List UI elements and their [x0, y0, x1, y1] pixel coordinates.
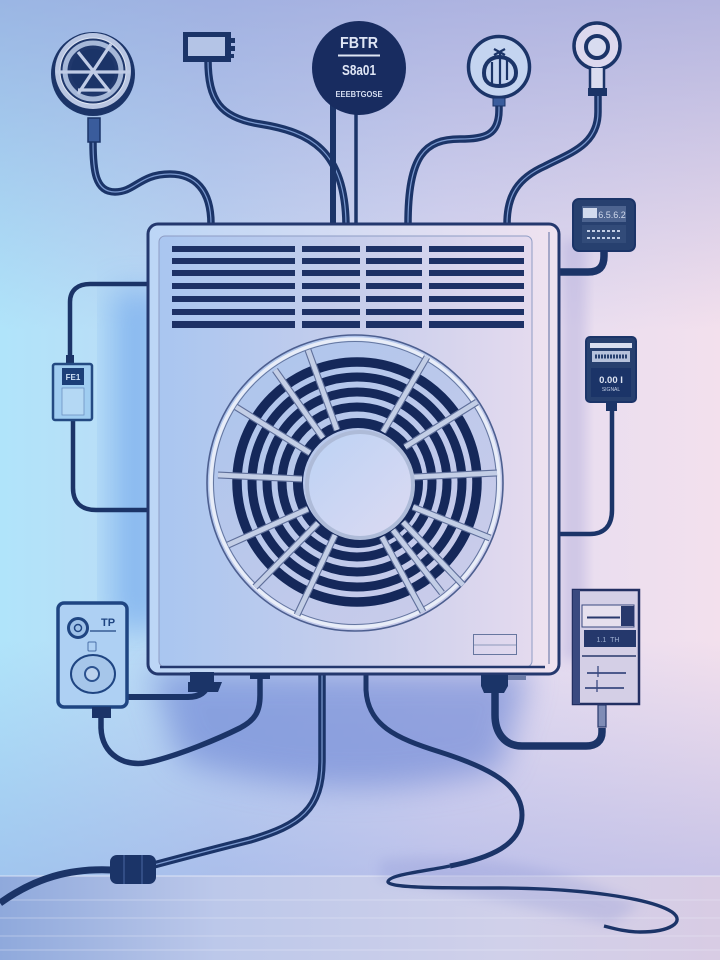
- icon: round dial: [468, 36, 530, 106]
- fan guard: [207, 335, 503, 631]
- cable junction block: [110, 855, 156, 884]
- right bottom connector: [481, 675, 526, 693]
- cables: left switch to unit: [70, 284, 150, 510]
- cable: top rectangle display to unit: [208, 60, 346, 224]
- cables: central badge to unit: [333, 105, 356, 224]
- cable: ring sensor to unit: [507, 96, 598, 224]
- icon: left inline switch: [53, 355, 92, 420]
- icon: lower right electrical box: [573, 590, 639, 727]
- cable: upper right meter to unit: [558, 250, 604, 272]
- meter readout: 6.5.6.2: [598, 210, 626, 220]
- cables: lower left control to unit: [101, 675, 260, 763]
- fan hub: [307, 432, 413, 538]
- box display reading: 1.1 TH: [597, 637, 619, 644]
- cable: lower right box to unit: [495, 692, 602, 746]
- badge small text: EEEBTGOSE: [336, 90, 383, 99]
- icon: top left crossed gauge: [51, 32, 135, 142]
- shadows cast by the unit: [112, 240, 640, 925]
- top vent grille: [172, 246, 524, 328]
- icon: upper right meter: [573, 199, 635, 251]
- switch label: FE1: [66, 373, 81, 382]
- looping cable on floor: [366, 672, 677, 932]
- air conditioner unit: [148, 224, 559, 674]
- meter value: 0.00 I: [599, 375, 623, 386]
- unit housing: [148, 224, 559, 674]
- fan spokes: [218, 350, 497, 615]
- icon: middle right meter: [586, 337, 636, 411]
- badge subtitle: S8a01: [342, 62, 376, 79]
- main cable to floor left: [0, 672, 322, 903]
- meter caption: SIGNAL: [602, 387, 620, 393]
- cable: round dial to unit: [408, 100, 499, 224]
- left bottom connector: [188, 672, 270, 692]
- badge title: FBTR: [340, 35, 378, 52]
- icon: top rectangular display: [183, 32, 235, 62]
- control label: TP: [101, 617, 115, 629]
- icon: ring sensor: [574, 23, 620, 96]
- rating plate: [474, 634, 516, 654]
- icon: lower left control box: [58, 603, 127, 718]
- cable: top left gauge to unit: [93, 142, 211, 224]
- floor: [0, 876, 720, 960]
- cable: middle right meter to unit: [558, 402, 612, 534]
- badge: central title circle: [312, 21, 406, 115]
